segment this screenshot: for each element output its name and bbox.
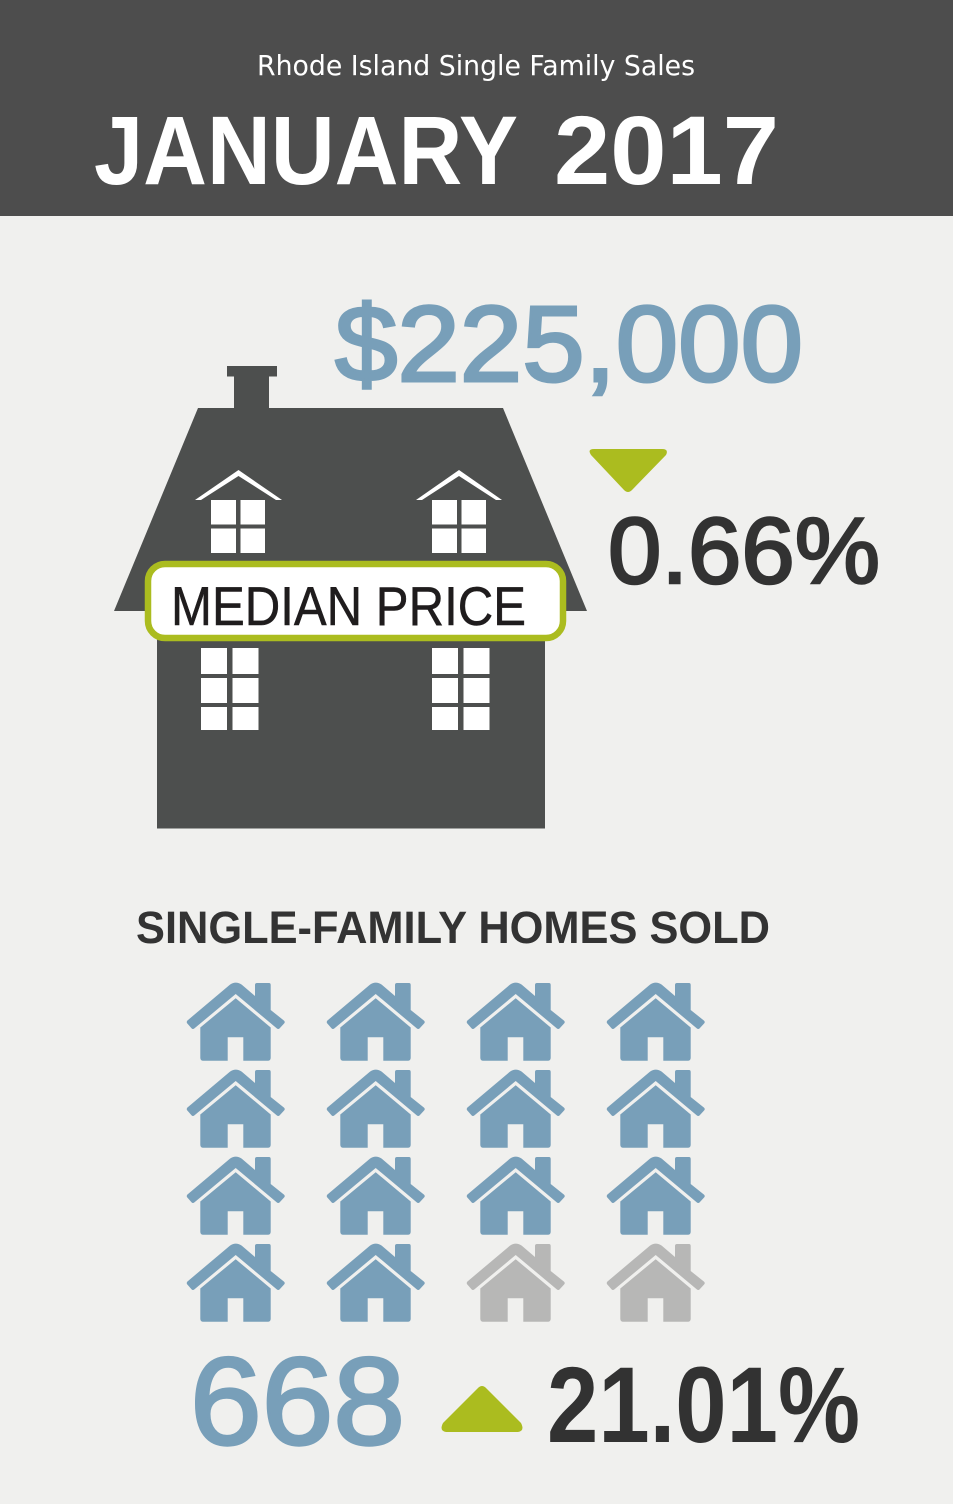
- title: 2017: [554, 96, 779, 205]
- row 3: [187, 1157, 705, 1235]
- row 4: [187, 1244, 705, 1322]
- dormer left: [195, 470, 282, 553]
- homes sold change: 21.01%: [547, 1344, 860, 1465]
- icon: large house: [114, 366, 587, 828]
- homes sold heading: SINGLE-FAMILY HOMES SOLD: [136, 902, 770, 953]
- median price value: $225,000: [335, 283, 803, 404]
- title: [94, 96, 779, 205]
- title: JANUARY: [94, 96, 518, 205]
- header band: [0, 0, 953, 216]
- median price change: 0.66%: [608, 498, 880, 603]
- chimney: [227, 366, 277, 410]
- house body: [157, 600, 545, 828]
- icon: up arrow: [442, 1386, 522, 1432]
- dormer right: [416, 470, 502, 553]
- lower window right: [432, 648, 490, 730]
- homes sold count: 668: [190, 1333, 405, 1471]
- row 2: [187, 1070, 705, 1148]
- subtitle: Rhode Island Single Family Sales: [257, 49, 695, 82]
- icon grid: homes sold: [187, 983, 705, 1322]
- icon: down arrow: [590, 449, 667, 492]
- roof: [114, 408, 587, 611]
- row 1: [187, 983, 705, 1061]
- median price label: MEDIAN PRICE: [171, 575, 526, 637]
- lower window left: [201, 648, 258, 730]
